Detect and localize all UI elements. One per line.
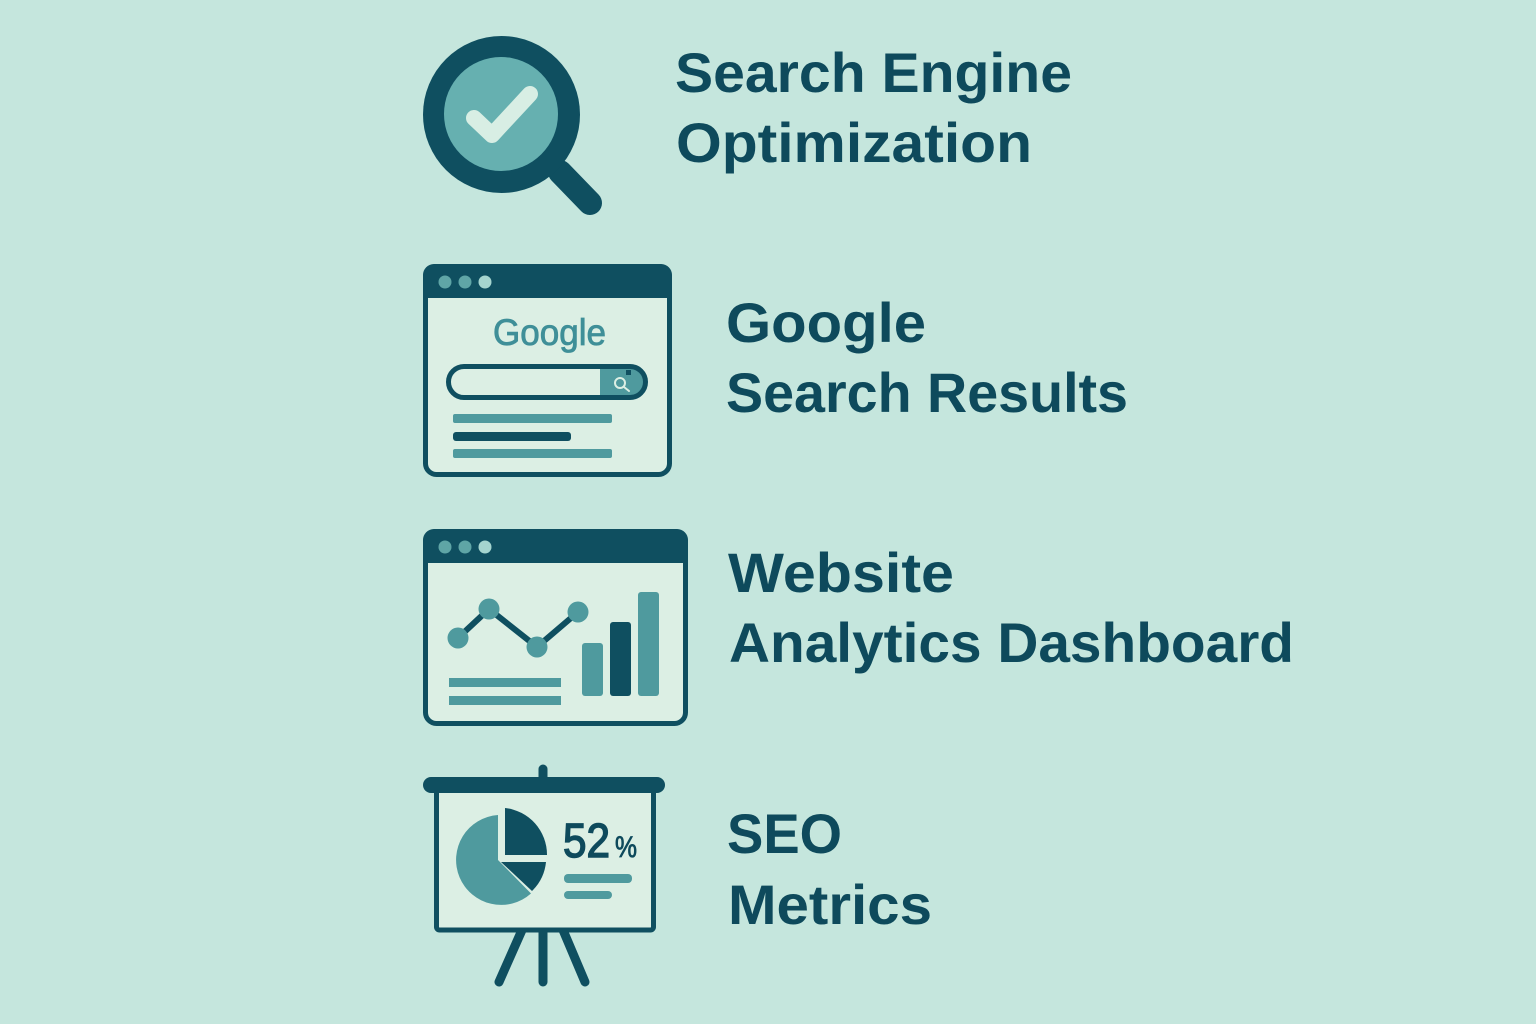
heading: Google Search Results: Google [726, 291, 926, 354]
icon: browser with Google search results [423, 264, 672, 474]
result lines [453, 414, 612, 458]
heading: SEO Metrics: SEO [727, 802, 842, 865]
text lines [449, 678, 561, 705]
heading: Website Analytics Dashboard: Website [728, 541, 954, 604]
bar chart [582, 592, 659, 696]
heading: SEO Metrics [727, 802, 932, 936]
heading: Google Search Results: Search Results [726, 361, 1128, 424]
icon: magnifying glass with check mark [423, 36, 590, 203]
metric value: % [615, 831, 637, 864]
heading: Website Analytics Dashboard [728, 541, 1294, 674]
pie chart [456, 808, 547, 905]
search bar [448, 366, 646, 398]
metric value: 52 [563, 815, 610, 868]
metric lines [564, 874, 632, 899]
window control dots [438, 540, 492, 554]
window control dots [438, 276, 492, 288]
icon: website analytics dashboard window [423, 529, 688, 724]
heading: Google Search Results [726, 291, 1128, 424]
heading: Search Engine Optimization: Search Engine [675, 41, 1072, 104]
Google logo text: Google [493, 312, 606, 353]
icon: presentation board with SEO metrics [423, 769, 665, 982]
heading: Search Engine Optimization [675, 41, 1072, 174]
line chart [448, 598, 588, 658]
heading: Website Analytics Dashboard: Analytics Dashboard [729, 611, 1294, 674]
heading: Search Engine Optimization: Optimization [676, 111, 1032, 174]
heading: SEO Metrics: Metrics [728, 873, 932, 936]
board stand [499, 769, 585, 982]
